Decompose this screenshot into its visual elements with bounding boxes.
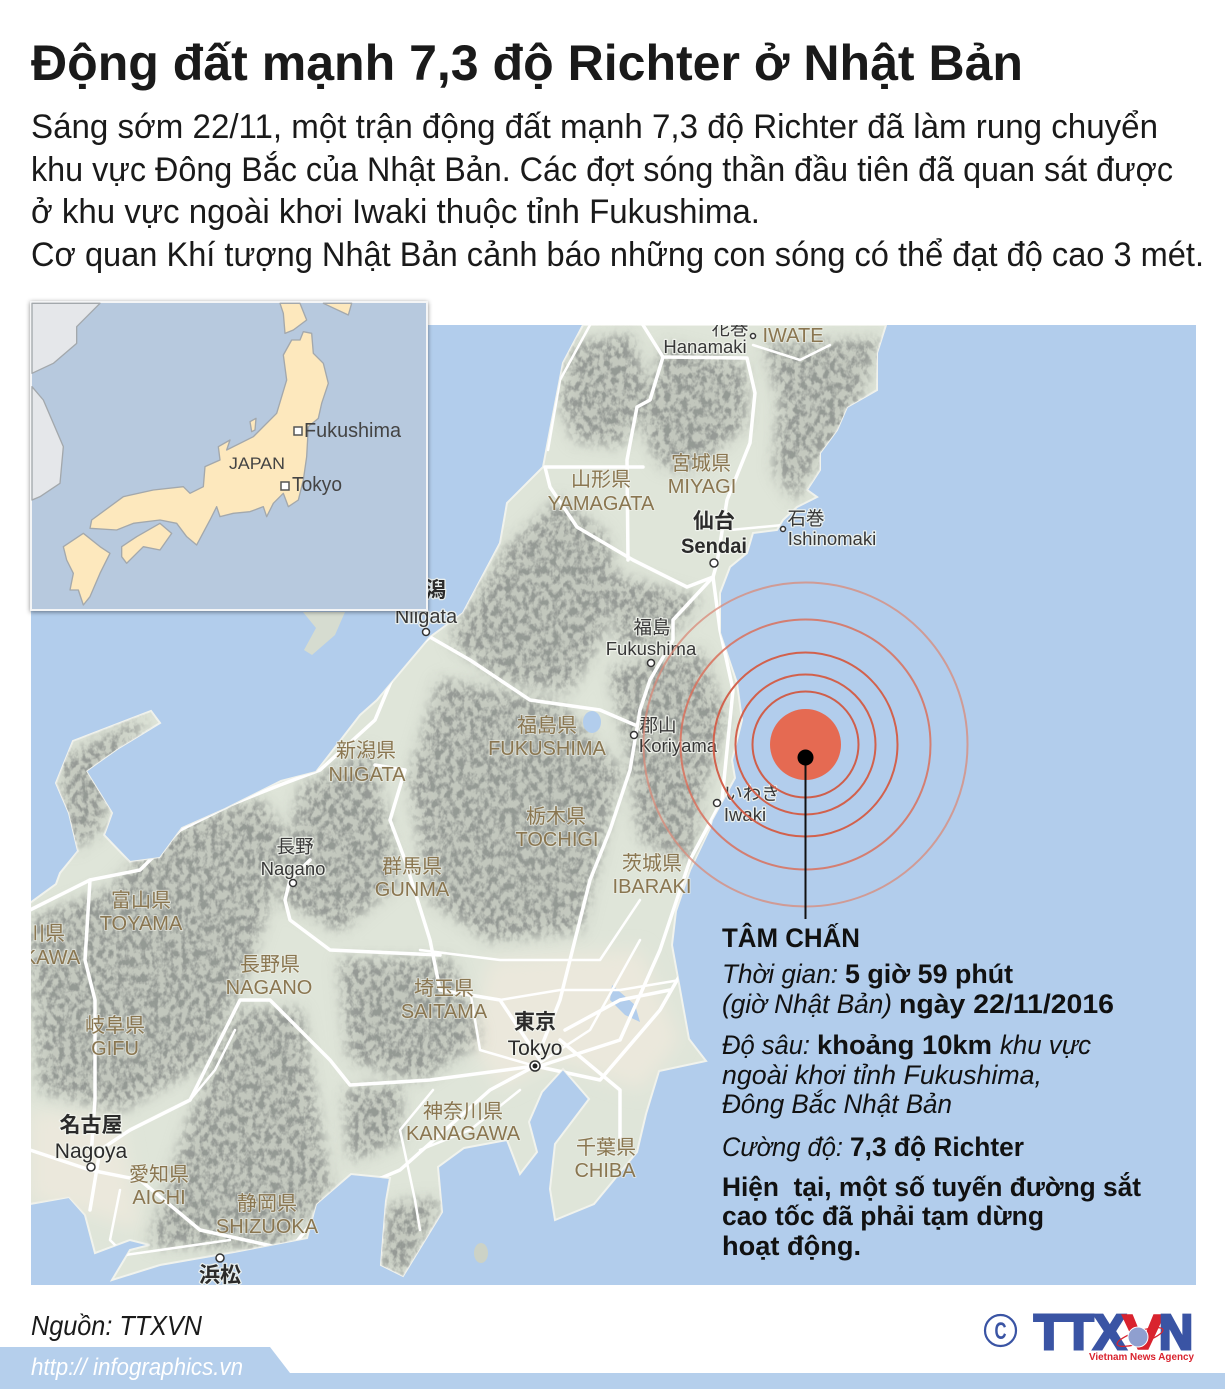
epicentre details: 7,3 độ Richter: [850, 1132, 1024, 1162]
inset: labels: [294, 427, 302, 435]
prefecture labels: SAITAMA: [401, 1001, 488, 1023]
earthquake rings: [644, 582, 968, 906]
footer bar: [0, 1347, 1225, 1389]
city labels: Hanamaki: [663, 336, 747, 357]
inset map: JAPAN: [229, 454, 285, 473]
prefecture labels: TOCHIGI: [516, 829, 598, 851]
city labels: 浜松: [199, 1264, 241, 1287]
epicentre details: 5 giờ 59 phút: [845, 959, 1013, 989]
prefecture labels: 岐阜県: [85, 1014, 145, 1037]
prefecture labels: 静岡県: [237, 1192, 297, 1215]
logo: TTXVN: Vietnam News Agency: [1089, 1351, 1194, 1363]
prefecture labels: 栃木県: [526, 805, 586, 828]
city labels: Niigata: [395, 606, 458, 628]
city labels: 新潟: [404, 579, 446, 602]
city labels: Ishinomaki: [788, 528, 876, 549]
prefecture labels: IWATE: [762, 325, 824, 347]
epicentre details: Độ sâu:: [722, 1030, 810, 1060]
intro text: [31, 108, 1204, 274]
lake: Kasumigaura: [610, 985, 640, 1022]
city labels: 名古屋: [60, 1114, 122, 1137]
title: Động đất mạnh 7,3 độ Richter ở Nhật Bản: [31, 35, 1023, 91]
logo: globe: [1115, 1324, 1165, 1350]
epicentre details: cao tốc đã phải tạm dừng: [722, 1201, 1044, 1231]
city labels: 長野: [276, 836, 314, 857]
city labels: 東京: [514, 1011, 556, 1034]
inset map: Fukushima: [304, 420, 402, 442]
terrain texture: [30, 335, 880, 1275]
intro text: khu vực Đông Bắc của Nhật Bản. Các đợt sóng thần đầu tiên đã quan sát được: [31, 151, 1173, 189]
epicentre details: [722, 922, 1141, 1261]
prefecture labels: [0, 325, 824, 1238]
prefecture labels: NAGANO: [226, 977, 312, 999]
island: Izu Oshima: [474, 1243, 488, 1263]
intro text: Cơ quan Khí tượng Nhật Bản cảnh báo những con sóng có thể đạt độ cao 3 mét.: [31, 236, 1204, 274]
prefecture labels: IBARAKI: [613, 876, 691, 898]
city labels: 郡山: [639, 715, 677, 736]
road network: [30, 325, 830, 1255]
intro text: ở khu vực ngoài khơi Iwaki thuộc tỉnh Fukushima.: [31, 193, 760, 231]
terrain: [30, 335, 880, 1275]
epicentre details: hoạt động.: [722, 1231, 861, 1261]
epicentre details: TÂM CHẤN: [722, 922, 860, 953]
prefecture labels: CHIBA: [574, 1160, 636, 1182]
island: Sado: [303, 612, 345, 655]
prefecture labels: 新潟県: [336, 739, 396, 762]
epicentre details: Đông Bắc Nhật Bản: [722, 1088, 952, 1119]
prefecture labels: 埼玉県: [414, 977, 474, 1000]
city labels: いわき: [724, 783, 780, 804]
prefecture labels: 群馬県: [382, 855, 442, 878]
lake: Inawashiro: [583, 711, 601, 733]
epicentre core: [770, 709, 841, 780]
inset map: Tokyo: [292, 474, 342, 496]
inset: neighbouring land: [32, 303, 100, 500]
city labels: 仙台: [693, 510, 735, 533]
prefecture labels: 茨城県: [622, 852, 682, 875]
city labels: Fukushima: [606, 638, 697, 659]
logo: copyright: [985, 1315, 1016, 1346]
logo: TTXVN: V: [1122, 1306, 1164, 1360]
city labels: Nagoya: [55, 1140, 128, 1163]
shaded ranges, base tone: [30, 335, 880, 1275]
prefecture labels: 千葉県: [576, 1136, 636, 1159]
prefecture labels: KANAGAWA: [406, 1123, 521, 1145]
epicentre details: ngoài khơi tỉnh Fukushima,: [722, 1060, 1042, 1090]
epicentre pointer: [798, 750, 814, 919]
epicentre details: Hiện tại, một số tuyến đường sắt: [722, 1171, 1141, 1202]
epicentre details: Thời gian:: [722, 959, 838, 989]
main map: [0, 318, 1196, 1287]
source: Nguồn: TTXVN: [31, 1310, 203, 1341]
prefecture labels: TOYAMA: [100, 913, 183, 935]
city labels: Iwaki: [724, 804, 766, 825]
inset: Japan islands: [63, 303, 352, 605]
city labels: [55, 318, 876, 1287]
plains: [30, 950, 680, 1230]
prefecture labels: 神奈川県: [423, 1100, 503, 1123]
prefecture labels: 山形県: [571, 468, 631, 491]
prefecture labels: AICHI: [132, 1187, 186, 1209]
prefecture labels: GIFU: [91, 1038, 139, 1060]
city labels: 花巻: [711, 318, 749, 339]
prefecture labels: FUKUSHIMA: [488, 738, 607, 760]
prefecture labels: SHIZUOKA: [216, 1216, 319, 1238]
prefecture labels: 愛知県: [129, 1163, 189, 1186]
epicentre details: khu vực: [1000, 1030, 1091, 1060]
city labels: Sendai: [681, 535, 747, 558]
epicentre details: ngày 22/11/2016: [899, 989, 1114, 1019]
prefecture labels: NIIGATA: [328, 764, 406, 786]
logo: TTXVN: N: [1159, 1306, 1193, 1360]
prefecture labels: 宮城県: [671, 452, 731, 475]
footer bar: http:// infographics.vn: [31, 1354, 243, 1381]
epicentre details: khoảng 10km: [817, 1030, 992, 1060]
land: Honshu: [30, 325, 886, 1280]
city labels: 石巻: [787, 508, 825, 529]
epicentre details: (giờ Nhật Bản): [722, 989, 892, 1019]
city labels: Tokyo: [508, 1037, 562, 1060]
epicentre details: Cường độ:: [722, 1132, 843, 1162]
logo: TTXVN: TTX: [1034, 1306, 1126, 1360]
intro text: Sáng sớm 22/11, một trận động đất mạnh 7,3 độ Richter đã làm rung chuyển: [31, 108, 1158, 146]
city labels: Nagano: [261, 858, 325, 879]
prefecture labels: 長野県: [240, 954, 300, 976]
prefecture labels: 石川県: [5, 923, 65, 945]
inset map: [31, 302, 427, 610]
city labels: 福島: [633, 617, 671, 638]
prefecture labels: 福島県: [517, 714, 577, 737]
prefecture labels: GUNMA: [375, 879, 450, 901]
prefecture labels: YAMAGATA: [548, 493, 655, 515]
prefecture labels: MIYAGI: [668, 476, 736, 498]
logo: copyright: C: [994, 1318, 1006, 1345]
prefecture labels: 富山県: [111, 889, 171, 912]
logo: TTXVN: [1034, 1306, 1194, 1363]
city labels: Koriyama: [639, 735, 718, 756]
